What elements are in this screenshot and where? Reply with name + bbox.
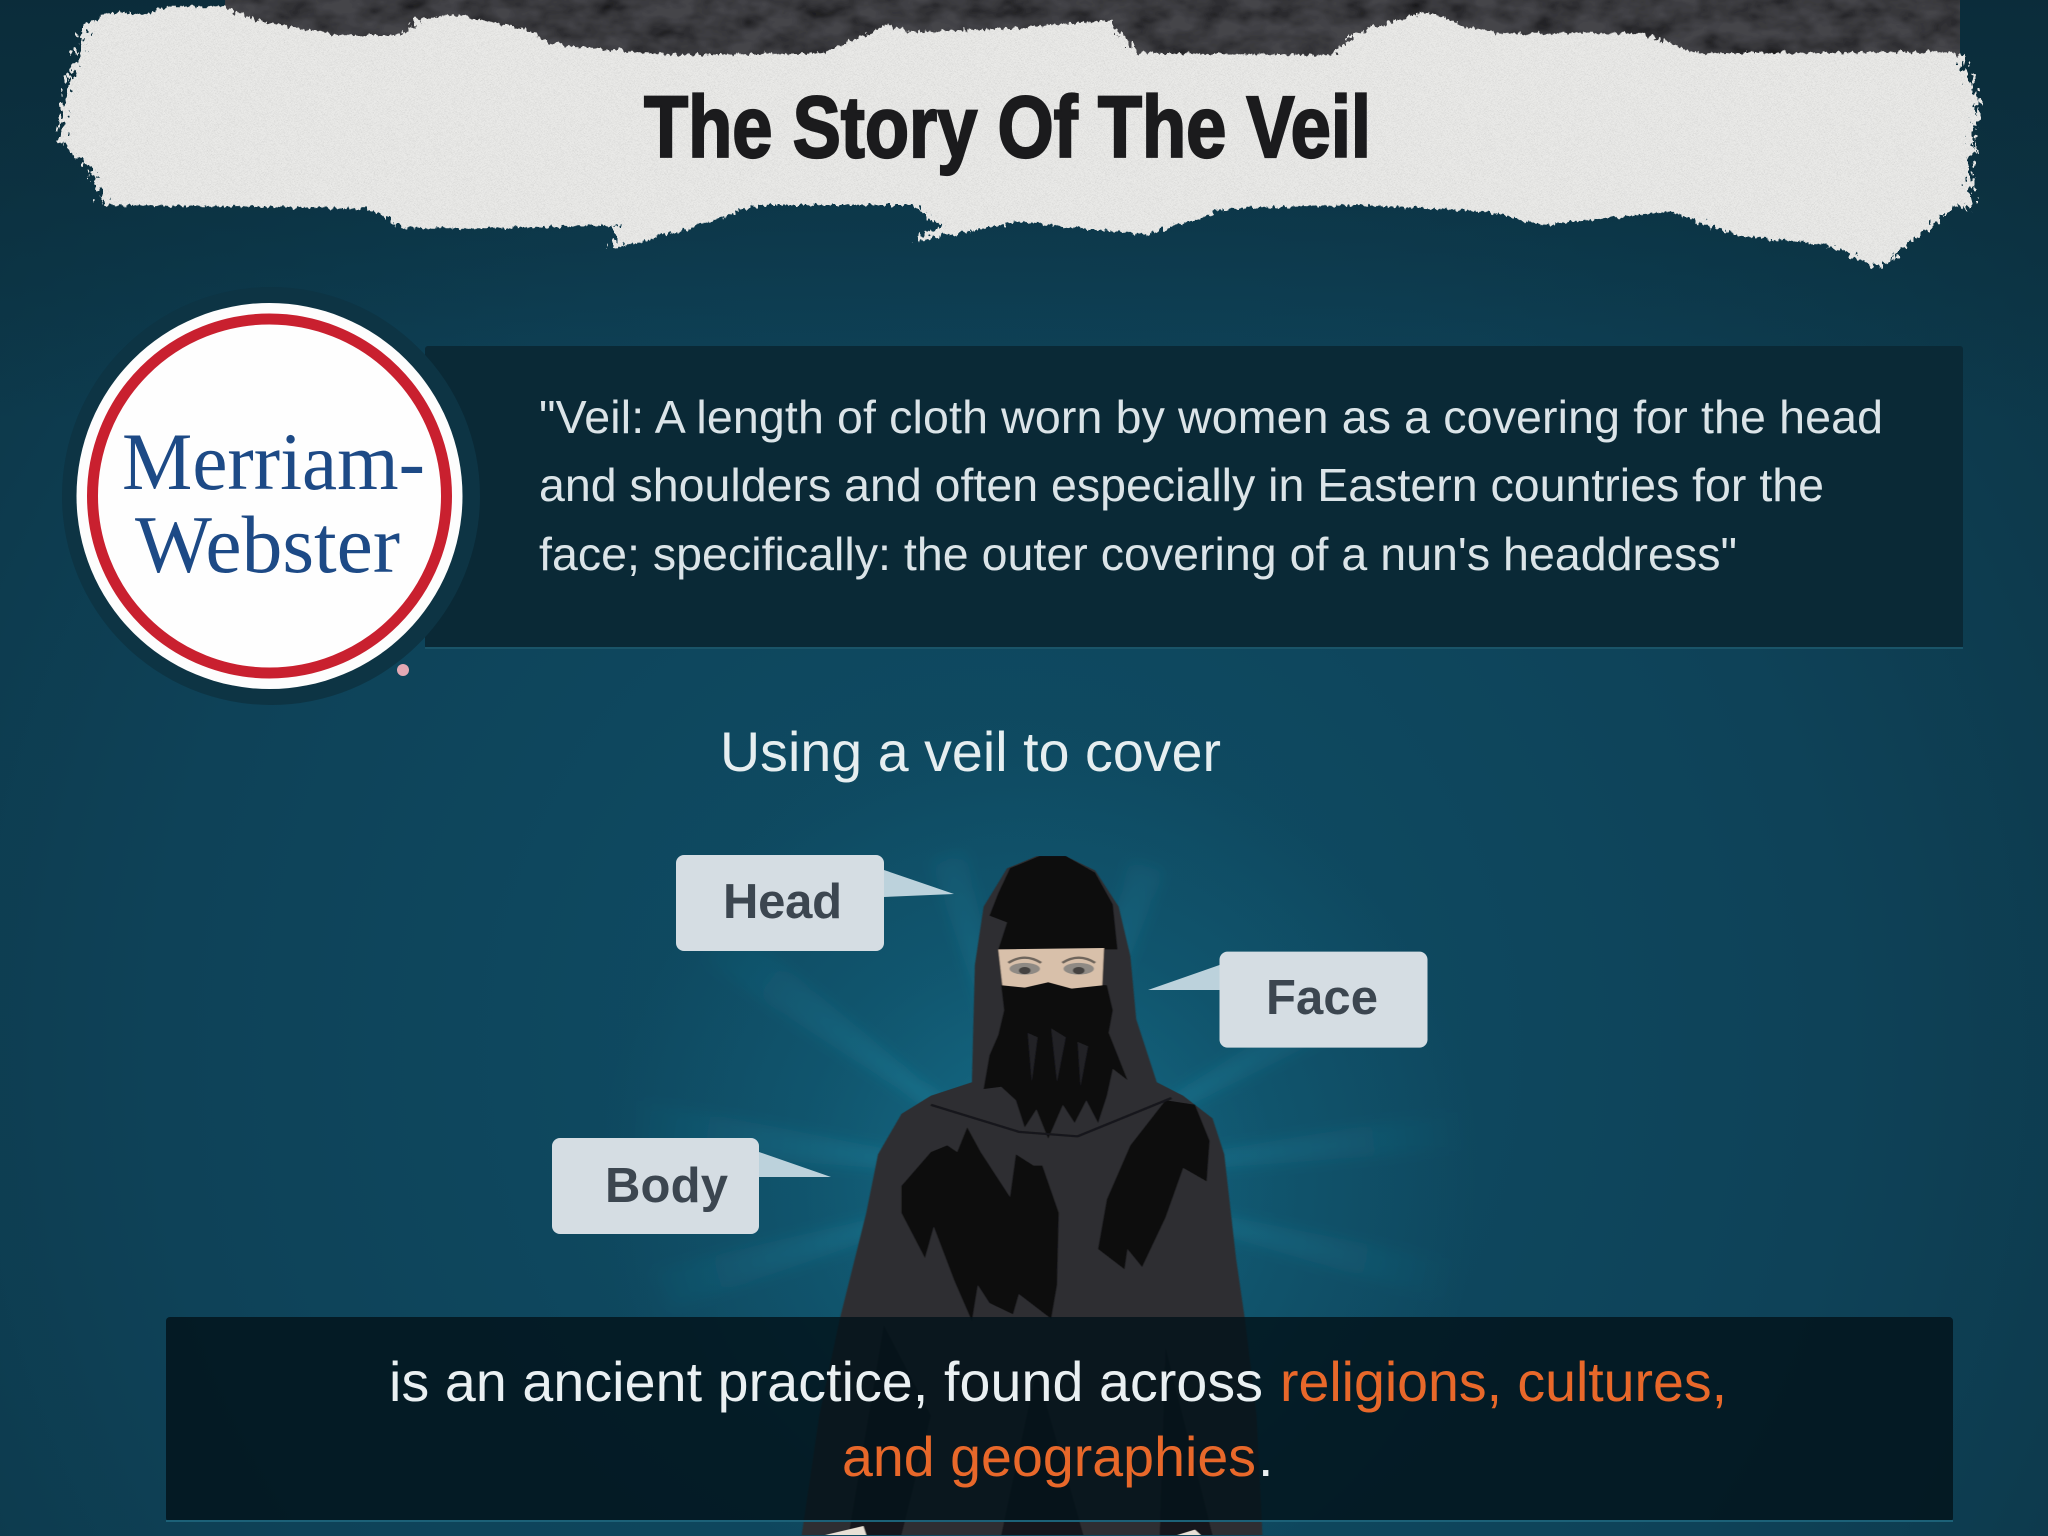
statement text: religions, cultures, xyxy=(1280,1351,1727,1413)
callout: head xyxy=(676,855,954,951)
torn paper banner xyxy=(59,6,1978,268)
callout: face xyxy=(1148,952,1428,1048)
callout: face: Face xyxy=(1266,971,1378,1025)
quote text: and shoulders and often especially in Eastern countries for the xyxy=(539,459,1824,511)
logo: Merriam-Webster seal: Webster xyxy=(135,499,400,590)
quote text: face; specifically: the outer covering of a nun's headdress" xyxy=(539,528,1737,580)
quote text: "Veil: A length of cloth worn by women as a covering for the head xyxy=(539,391,1883,443)
light rays behind figure xyxy=(674,851,1409,1317)
logo: Merriam-Webster seal xyxy=(62,287,480,705)
quote text xyxy=(539,391,1883,580)
statement text: and geographies xyxy=(842,1426,1256,1488)
heading: using a veil to cover: Using a veil to cover xyxy=(720,721,1221,783)
title: The Story Of The Veil xyxy=(644,79,1371,176)
statement text: is an ancient practice, found across xyxy=(389,1351,1263,1413)
statement text xyxy=(389,1351,1727,1488)
figure: veiled woman xyxy=(802,856,1262,1535)
panel: ancient practice statement xyxy=(166,1317,1953,1522)
callout: body: Body xyxy=(605,1159,728,1213)
face opening xyxy=(998,948,1104,989)
logo: Merriam-Webster seal: Merriam- xyxy=(122,416,425,507)
rock wall at top xyxy=(225,0,1960,60)
statement text: . xyxy=(1258,1426,1273,1488)
callout: body xyxy=(552,1138,831,1234)
panel: definition xyxy=(425,346,1963,649)
callout: head: Head xyxy=(723,875,842,929)
